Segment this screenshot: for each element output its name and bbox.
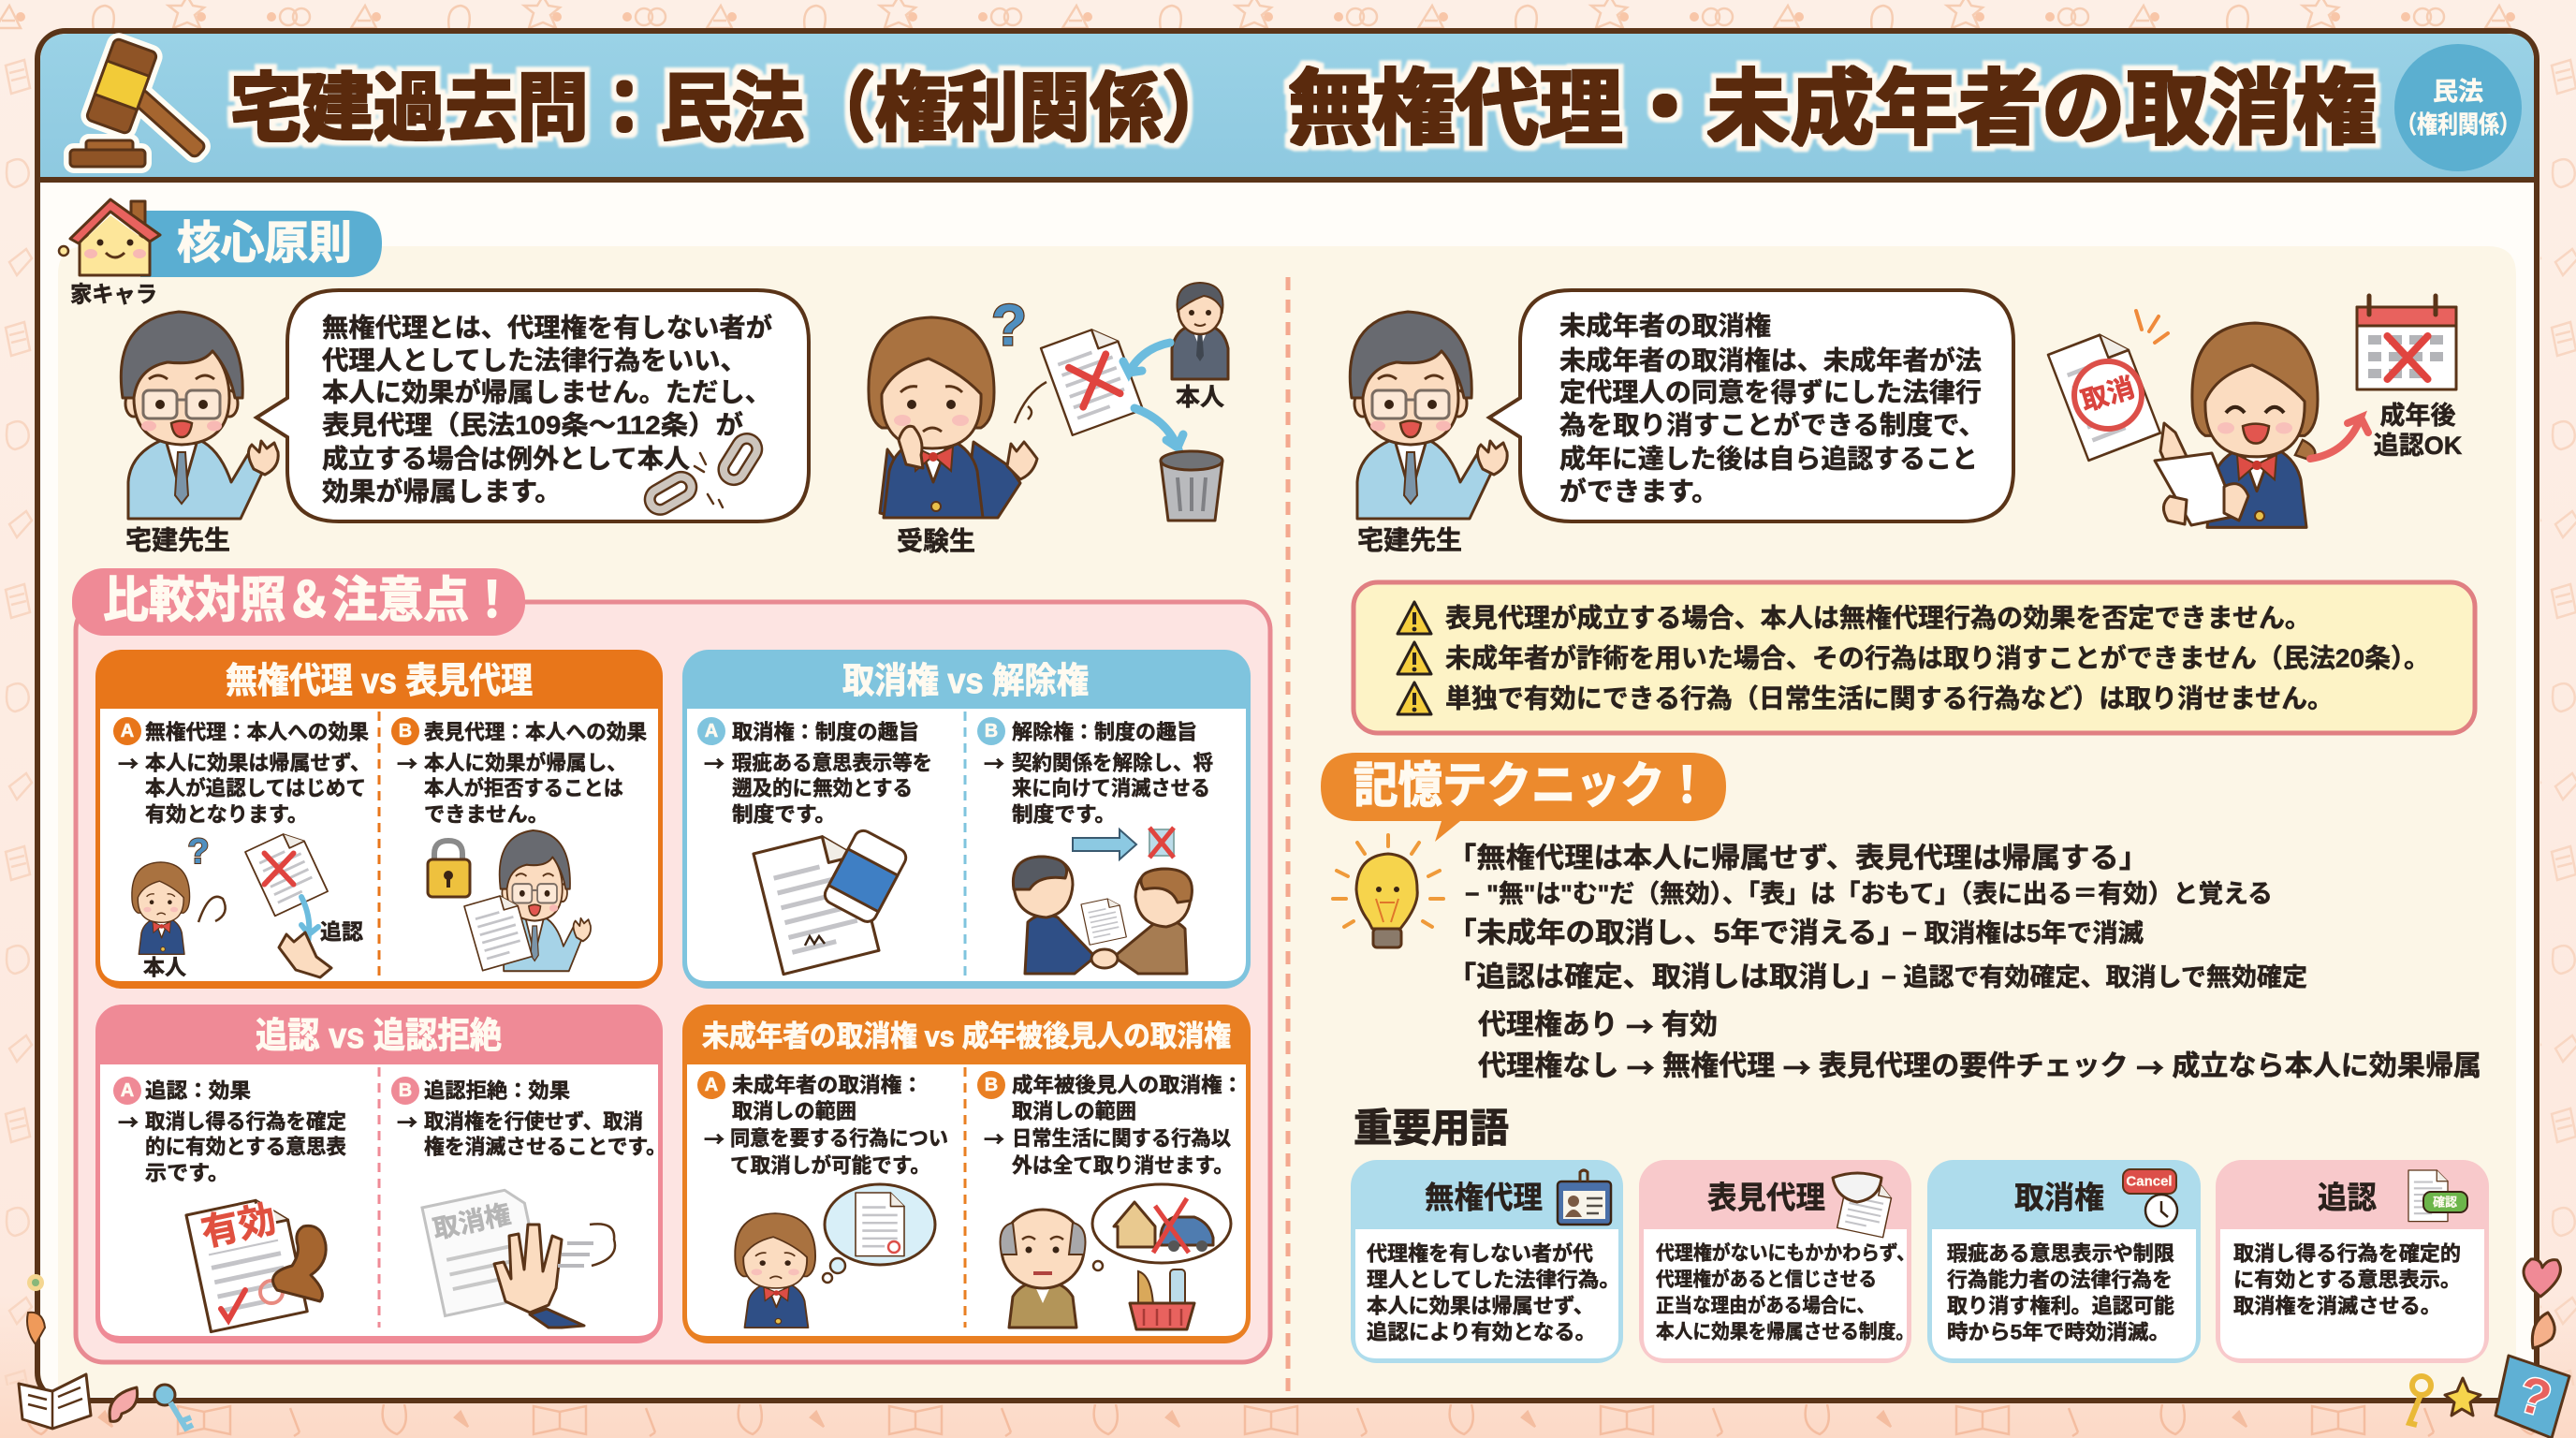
heading: 重要用語: 重要用語	[1354, 1107, 1509, 1150]
speech bubble: 無権代理: 効果が帰属します。	[322, 476, 562, 506]
cream content panel	[58, 246, 2516, 1397]
arrow: rising to adulthood	[2310, 418, 2368, 459]
speech bubble: 無権代理: 無権代理とは、代理権を有しない者が	[322, 313, 772, 343]
icon: house character	[59, 199, 160, 275]
item B: 追認拒絶：効果	[424, 1078, 570, 1103]
item A: 本人に効果は帰属せず、	[145, 751, 371, 775]
decoration: left small flower and carrot	[27, 1274, 45, 1344]
warning item 2: 未成年者が詐術を用いた場合、その行為は取り消すことができません（民法20条）。	[1445, 642, 2430, 672]
term card: 表見代理	[1639, 1160, 1915, 1363]
memory techniques text: 代理権あり → 有効	[1478, 1005, 1718, 1046]
item B: B	[399, 721, 412, 741]
term card: 追認	[2216, 1160, 2489, 1363]
illustration: 有効 document and stamp: 有効	[198, 1198, 280, 1255]
item B: →	[984, 1123, 1004, 1153]
comparison card: 無権代理 vs 表見代理: 無権代理 vs 表見代理	[226, 662, 533, 701]
term card: 取消権: 取消権	[2014, 1180, 2104, 1215]
item A: →	[704, 748, 724, 778]
badge: 民法（権利関係）: （権利関係）	[2396, 110, 2520, 139]
icon: gavel	[70, 38, 206, 167]
character: teacher left	[121, 312, 278, 519]
item B	[977, 717, 1213, 826]
item A: 取消権：制度の趣旨	[732, 721, 919, 743]
item A: 的に有効とする意思表	[145, 1135, 346, 1159]
speech bubble: 未成年者の取消権: 為を取り消すことができる制度で、	[1559, 410, 1985, 440]
speech bubble: 未成年者の取消権	[1489, 290, 2013, 521]
badge: 民法（権利関係）: 民法	[2433, 78, 2483, 106]
item A	[113, 717, 371, 826]
term card: 無権代理: 理人としてした法律行為。	[1367, 1268, 1620, 1292]
label: principal: 本人	[1176, 383, 1224, 411]
memory techniques text	[1447, 843, 2481, 1087]
icon: calendar	[2357, 296, 2456, 389]
item B	[391, 717, 647, 826]
term card: 取消権: 取り消す権利。追認可能	[1947, 1294, 2174, 1318]
item A: 遡及的に無効とする	[732, 777, 913, 800]
item B: →	[397, 748, 417, 778]
item A: 追認：効果	[145, 1078, 251, 1103]
item B: B	[399, 1080, 412, 1101]
warning item 1: 表見代理が成立する場合、本人は無権代理行為の効果を否定できません。	[1445, 603, 2311, 633]
term card: 表見代理: 代理権がないにもかかわらず、	[1656, 1241, 1915, 1264]
icon: 取消 stamped document	[2048, 311, 2168, 461]
item A: A	[705, 721, 718, 741]
icon: question mark: ?	[991, 294, 1027, 358]
arrow: principal to document	[1123, 343, 1170, 373]
speech bubble: 未成年者の取消権: 成年に達した後は自ら追認すること	[1559, 444, 1978, 474]
item A	[697, 1071, 948, 1178]
item B: 日常生活に関する行為以	[1012, 1127, 1231, 1150]
title	[230, 62, 2377, 155]
term card: 無権代理: 無権代理	[1425, 1180, 1543, 1215]
section heading: 記憶テクニック！: 記憶テクニック！	[1354, 759, 1709, 814]
item B: 本人に効果が帰属し、	[424, 751, 627, 775]
term card: 無権代理: 追認により有効となる。	[1367, 1320, 1596, 1344]
item B: 外は全て取り消せます。	[1012, 1153, 1234, 1178]
character: student thinking	[869, 294, 1046, 518]
item B: B	[985, 1075, 998, 1095]
icon: cancel and clock	[2123, 1169, 2177, 1226]
label: student: 受験生	[897, 526, 975, 556]
icon: ID badge	[1558, 1170, 1611, 1225]
item B	[391, 1077, 666, 1159]
comparison card: 取消権 vs 解除権: 取消権 vs 解除権	[842, 662, 1089, 701]
term card: 取消権: 瑕疵ある意思表示や制限	[1947, 1241, 2174, 1266]
item B: 来に向けて消滅させる	[1012, 777, 1210, 800]
term card: 表見代理: 表見代理	[1707, 1180, 1825, 1215]
section heading: 比較対照＆注意点！	[72, 568, 1270, 1362]
decoration: bottom-left book, petal and key	[19, 1374, 193, 1431]
item A: →	[118, 1107, 139, 1137]
speech bubble: 無権代理: 表見代理（民法109条～112条）が	[322, 410, 743, 440]
item B: 表見代理：本人への効果	[424, 721, 647, 743]
term card: 無権代理: 本人に効果は帰属せず、	[1367, 1294, 1594, 1318]
term card: 追認: に有効とする意思表示。	[2233, 1268, 2461, 1292]
item B	[977, 1071, 1243, 1178]
label: 成年後 追認OK: 成年後	[2379, 402, 2456, 430]
item B: できません。	[424, 803, 549, 826]
warning item 3: 単独で有効にできる行為（日常生活に関する行為など）は取り消せません。	[1445, 683, 2334, 713]
item A: A	[705, 1075, 718, 1095]
speech bubble: 無権代理: 本人に効果が帰属しません。ただし、	[322, 376, 771, 406]
term card: 取消権: 行為能力者の法律行為を	[1947, 1268, 2173, 1292]
memory techniques text: − "無"は"む"だ（無効）、「表」は「おもて」（表に出る＝有効）と覚える	[1465, 880, 2273, 908]
decoration: right heart and petal	[2524, 1259, 2560, 1348]
item A	[113, 1077, 346, 1185]
section heading: 核心原則	[140, 211, 382, 277]
comparison card: 未成年者の取消権 vs 成年被後見人の取消権: 未成年者の取消権 vs 成年被後見人の取消権	[702, 1020, 1231, 1052]
warning box	[1354, 582, 2475, 733]
label: 家キャラ: 家キャラ	[70, 283, 157, 307]
item A: 制度です。	[732, 803, 836, 826]
illustration: document and eraser	[754, 828, 909, 975]
character: teacher right	[1350, 312, 1507, 519]
icon: trash can	[1161, 451, 1222, 521]
item B: 取消しの範囲	[1012, 1099, 1136, 1123]
comparison card: 無権代理 vs 表見代理	[95, 650, 663, 989]
icon: 取消 stamped document: 取消	[2077, 372, 2138, 418]
term card: 取消権	[1927, 1160, 2201, 1363]
item A: 取消しの範囲	[732, 1099, 856, 1123]
label: 成年後 追認OK	[2374, 402, 2463, 460]
item A: 同意を要する行為につい	[730, 1127, 948, 1150]
item B: B	[985, 721, 998, 741]
divider: left and right columns	[1286, 277, 1290, 1397]
section heading: 記憶テクニック！	[1321, 753, 1726, 842]
header banner	[40, 34, 2534, 180]
item B: →	[397, 1107, 417, 1137]
term card: 無権代理: 代理権を有しない者が代	[1367, 1241, 1593, 1266]
item A: A	[121, 1080, 134, 1101]
illustration: elderly person, house and car crossed out, shopping basket	[1000, 1184, 1231, 1329]
speech bubble: 無権代理: 代理人としてした法律行為をいい、	[322, 346, 747, 374]
speech bubble: 未成年者の取消権: 未成年者の取消権	[1559, 311, 1771, 341]
memory techniques text: − 追認で有効確定、取消しで無効確定	[1881, 963, 2307, 991]
term card: 表見代理: 正当な理由がある場合に、	[1656, 1294, 1875, 1316]
icon: document with confirm tag	[2408, 1170, 2467, 1222]
illustration: refused document and hand: 取消権	[431, 1199, 513, 1244]
item A	[697, 717, 932, 826]
item A: →	[118, 748, 139, 778]
speech bubble: 未成年者の取消権: 定代理人の同意を得ずにした法律行	[1559, 378, 1982, 406]
memory techniques text: 「追認は確定、取消しは取消し」	[1447, 962, 1886, 992]
icon: document with confirm tag: 確認	[2433, 1195, 2457, 1210]
decoration: bottom-right key, star and question notebook: ?	[2512, 1366, 2557, 1428]
illustration: refused document and hand	[422, 1187, 615, 1328]
term card: 追認: 追認	[2318, 1180, 2377, 1215]
item B: 契約関係を解除し、将	[1012, 751, 1213, 775]
item A: 本人が追認してはじめて	[145, 777, 366, 800]
decoration: bottom-right key, star and question notebook	[2409, 1356, 2569, 1438]
icon: broken chain	[646, 434, 761, 513]
icon: cancel and clock: Cancel	[2126, 1174, 2173, 1189]
memory techniques text: 代理権なし → 無権代理 → 表見代理の要件チェック → 成立なら本人に効果帰属	[1478, 1046, 2481, 1087]
memory techniques text: 「未成年の取消し、5年で消える」	[1447, 917, 1907, 949]
term card: 無権代理	[1351, 1160, 1623, 1363]
illustration: student, document, ratify: 本人	[143, 955, 186, 979]
item B: 権を消滅させることです。	[424, 1135, 666, 1159]
item A: 示です。	[145, 1161, 229, 1185]
term card: 追認: 取消し得る行為を確定的	[2233, 1241, 2461, 1266]
illustration: 有効 document and stamp	[186, 1195, 326, 1332]
title: 宅建過去問：民法（権利関係）	[230, 67, 1234, 150]
label: teacher right: 宅建先生	[1357, 526, 1462, 554]
comparison card: 未成年者の取消権 vs 成年被後見人の取消権	[682, 1005, 1251, 1343]
memory techniques text: − 取消権は5年で消滅	[1902, 919, 2144, 947]
item A: →	[704, 1123, 724, 1153]
character: student happy	[2155, 323, 2318, 527]
speech bubble: 無権代理: 成立する場合は例外として本人	[322, 444, 690, 474]
label: 成年後 追認OK: 追認OK	[2374, 432, 2463, 460]
item A: 未成年者の取消権：	[732, 1073, 923, 1097]
badge: 民法（権利関係）	[2394, 44, 2522, 171]
term card: 取消権: 時から5年で時効消滅。	[1947, 1320, 2170, 1344]
item A: 無権代理：本人への効果	[145, 721, 369, 743]
term card: 追認: 取消権を消滅させる。	[2233, 1294, 2441, 1318]
illustration: student, document, ratify: 追認	[320, 919, 363, 944]
illustration: student, document, ratify	[132, 828, 363, 979]
item B: 解除権：制度の趣旨	[1012, 721, 1197, 743]
term card: 表見代理: 代理権があると信じさせる	[1656, 1268, 1877, 1290]
icon: mask and document	[1833, 1173, 1894, 1238]
section heading: 比較対照＆注意点！: 比較対照＆注意点！	[103, 574, 515, 628]
item B: 制度です。	[1012, 803, 1116, 826]
item A: 有効となります。	[145, 803, 308, 826]
item B: 本人が拒否することは	[424, 777, 623, 800]
label: teacher left: 宅建先生	[125, 526, 230, 554]
speech bubble: 未成年者の取消権: ができます。	[1559, 476, 1719, 506]
illustration: minor with contract thought	[735, 1184, 935, 1328]
character: principal	[1172, 283, 1228, 379]
arrow: document to trash	[1134, 408, 1183, 448]
title: 無権代理・未成年者の取消権	[1288, 62, 2377, 155]
speech bubble: 未成年者の取消権: 未成年者の取消権は、未成年者が法	[1559, 345, 1982, 374]
item B: 成年被後見人の取消権：	[1012, 1073, 1243, 1097]
illustration: student, document, ratify: ?	[187, 832, 210, 872]
icon: rejected document	[1041, 323, 1143, 435]
comparison card: 取消権 vs 解除権	[682, 650, 1251, 989]
item A: 取消し得る行為を確定	[145, 1110, 346, 1133]
illustration: handshake with future cancellation	[1013, 828, 1192, 974]
illustration: lock and teacher	[428, 830, 591, 971]
speech bubble: 無権代理	[256, 290, 809, 521]
section heading: 核心原則: 核心原則	[177, 219, 352, 268]
icon: light bulb	[1333, 835, 1443, 947]
item A: て取消しが可能です。	[730, 1153, 930, 1178]
comparison card: 追認 vs 追認拒絶	[95, 1005, 666, 1343]
comparison card: 追認 vs 追認拒絶: 追認 vs 追認拒絶	[256, 1017, 502, 1056]
term card: 表見代理: 本人に効果を帰属させる制度。	[1656, 1322, 1914, 1343]
item A: A	[121, 721, 134, 741]
item B: 取消権を行使せず、取消	[424, 1110, 643, 1133]
item A: 瑕疵ある意思表示等を	[732, 751, 932, 775]
memory techniques text: 「無権代理は本人に帰属せず、表見代理は帰属する」	[1447, 843, 2148, 874]
item B: →	[984, 748, 1004, 778]
